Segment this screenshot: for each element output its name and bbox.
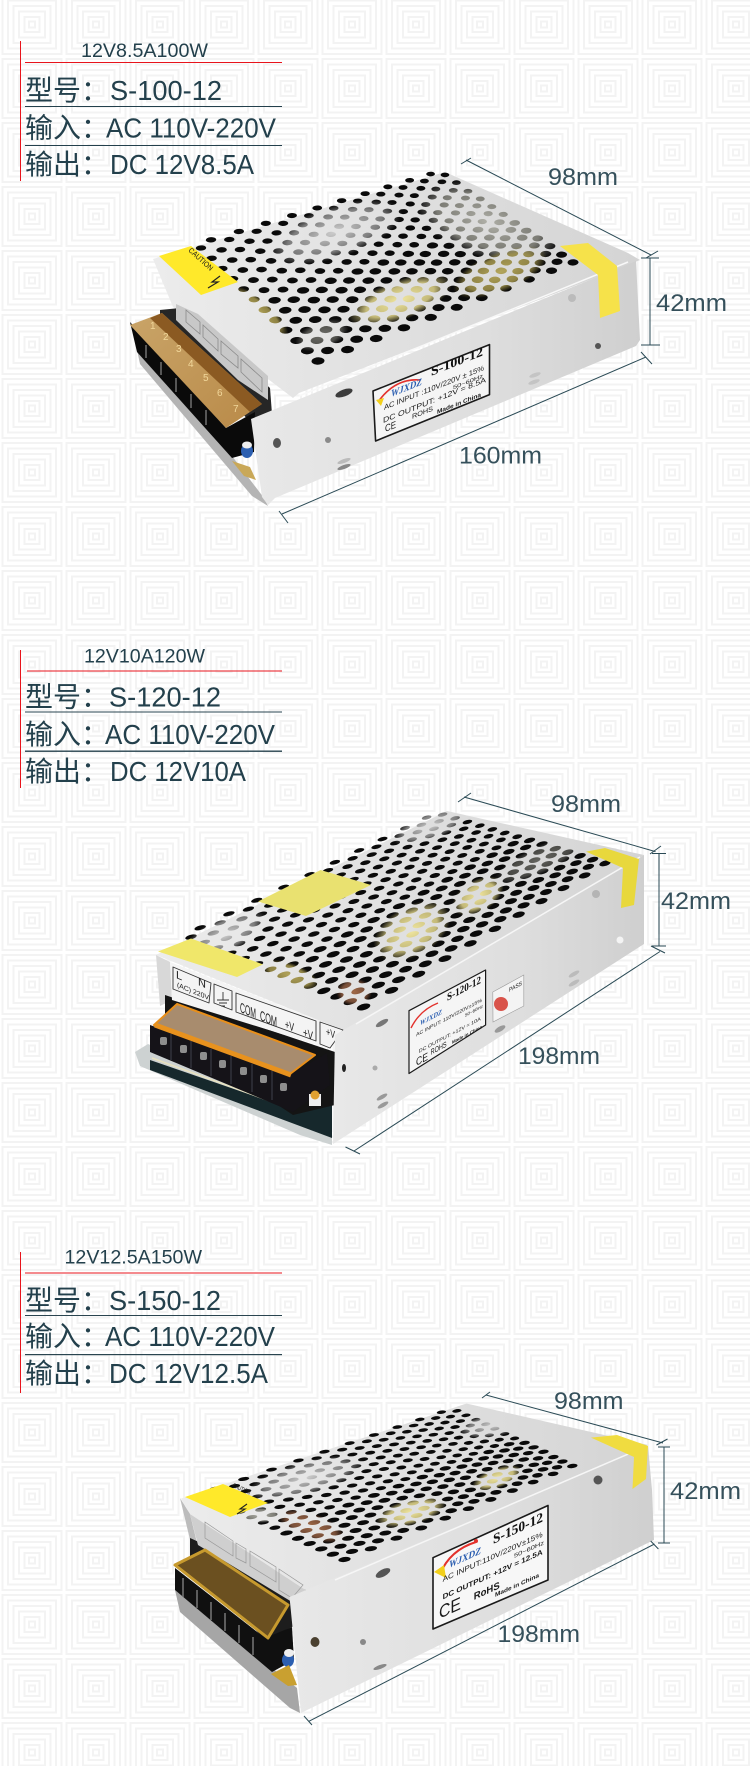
length value: 198mm bbox=[498, 1621, 580, 1648]
label frequency: 50~60Hz bbox=[514, 1540, 544, 1560]
clear base flange bbox=[135, 1044, 332, 1145]
PASS sticker bbox=[493, 975, 524, 1022]
output row: DC 12V10A bbox=[110, 756, 246, 787]
product photo: S-150-12 power supply bbox=[170, 1380, 654, 1713]
label output line: DC OUTPUT: +12V = 12.5A bbox=[443, 1547, 543, 1601]
input row bbox=[25, 1321, 275, 1352]
label logo: WJXDZ bbox=[449, 1546, 482, 1571]
length value: 160mm bbox=[459, 442, 542, 470]
terminal numbers bbox=[150, 321, 239, 415]
side panel highlight bbox=[299, 262, 628, 396]
output row: 输出： bbox=[25, 149, 109, 180]
model row: 型号： bbox=[25, 682, 109, 712]
terminal label strip bbox=[170, 962, 343, 1049]
terminal label strip bbox=[176, 304, 268, 400]
terminal label boxes bbox=[173, 967, 343, 1048]
label origin: Made in China bbox=[452, 1024, 482, 1046]
terminal markings: +V bbox=[285, 1017, 294, 1035]
terminal label boxes bbox=[186, 310, 262, 392]
dimensions: S-120-12 bbox=[346, 791, 731, 1154]
product label bbox=[433, 1506, 548, 1629]
yellow caution label bbox=[185, 1482, 268, 1517]
output row bbox=[25, 149, 254, 180]
label CE mark: CE bbox=[416, 1050, 428, 1069]
red heading rule bbox=[27, 670, 282, 672]
PASS sticker: PASS bbox=[509, 980, 522, 994]
length line bbox=[346, 946, 665, 1154]
length line bbox=[304, 1541, 658, 1725]
height line bbox=[658, 1447, 670, 1543]
model row: S-150-12 bbox=[109, 1285, 221, 1316]
model row: S-100-12 bbox=[110, 75, 222, 106]
red vertical rule bbox=[20, 1252, 21, 1393]
label input line: AC INPUT:110V/220V±15% bbox=[443, 1530, 543, 1584]
row rule bbox=[25, 145, 282, 146]
output row: DC 12V8.5A bbox=[110, 149, 254, 180]
yellow caution label: CAUTION bbox=[231, 1482, 252, 1497]
model row bbox=[25, 1285, 221, 1316]
side panel bbox=[290, 1446, 654, 1713]
terminal label strip bbox=[190, 1514, 310, 1602]
bottom flange bbox=[137, 350, 268, 506]
side panel holes bbox=[342, 890, 624, 1110]
yellow seal label bbox=[560, 243, 620, 318]
circuit board edge bbox=[232, 461, 256, 480]
label ROHS: ROHS bbox=[412, 404, 433, 421]
terminal numbers: 3 bbox=[176, 344, 182, 355]
product label bbox=[409, 970, 486, 1074]
panel: S-100-12 specification bbox=[20, 40, 282, 181]
circuit board edge bbox=[271, 1665, 297, 1686]
terminal screws bbox=[160, 1037, 287, 1091]
input row: 输入： bbox=[25, 1321, 109, 1352]
output row bbox=[25, 756, 246, 787]
label output line: DC OUTPUT: +12V = 8.5A bbox=[383, 375, 487, 425]
output row bbox=[25, 1358, 268, 1389]
potentiometer bbox=[309, 1090, 321, 1106]
output row: 输出： bbox=[25, 756, 109, 787]
label input line: AC INPUT: 110V/220V±15% bbox=[416, 998, 482, 1038]
terminal block notches bbox=[183, 1578, 253, 1655]
input row bbox=[25, 719, 275, 750]
cavity behind terminals bbox=[165, 995, 335, 1115]
earth symbol bbox=[217, 992, 229, 1006]
heading: 12V8.5A100W: 12V8.5A100W bbox=[81, 40, 209, 62]
label CE mark: CE bbox=[385, 420, 396, 435]
terminal numbers: 6 bbox=[217, 388, 223, 399]
faint terminal boxes bbox=[205, 1522, 303, 1598]
pale caution label bbox=[158, 938, 263, 977]
input row: AC 110V-220V bbox=[105, 1321, 275, 1352]
width line bbox=[458, 793, 661, 854]
label frequency: 50~60Hz bbox=[453, 374, 483, 391]
label logo: WJXDZ bbox=[420, 1007, 442, 1027]
model row: 型号： bbox=[25, 75, 109, 106]
label origin: Made in China bbox=[495, 1572, 540, 1599]
width line bbox=[482, 1392, 668, 1445]
terminal numbers: 1 bbox=[150, 321, 156, 332]
panel: S-150-12 specification bbox=[20, 1246, 282, 1393]
row rule bbox=[25, 1315, 282, 1316]
top cover bbox=[156, 811, 644, 1030]
label model: S-100-12 bbox=[431, 344, 483, 379]
label model: S-120-12 bbox=[447, 974, 481, 1004]
label frequency: 50~60Hz bbox=[465, 1003, 484, 1019]
width value: 98mm bbox=[554, 1388, 624, 1415]
side panel bbox=[251, 261, 640, 505]
yellow caution label bbox=[159, 246, 238, 295]
output row: DC 12V12.5A bbox=[109, 1358, 268, 1389]
vent holes bbox=[196, 172, 579, 365]
input row bbox=[25, 112, 276, 144]
yellow caution label: CAUTION bbox=[187, 246, 215, 273]
side panel bbox=[333, 855, 644, 1144]
yellow seal label bbox=[586, 848, 639, 908]
top cover bbox=[181, 1404, 648, 1593]
gap behind terminal labels bbox=[160, 308, 272, 422]
terminal numbers: 2 bbox=[163, 332, 169, 343]
terminal markings: L bbox=[176, 969, 182, 983]
red vertical rule bbox=[20, 650, 21, 788]
height value: 42mm bbox=[661, 888, 731, 915]
terminal block divisions bbox=[171, 1034, 272, 1100]
side panel highlight bbox=[356, 857, 640, 1024]
terminal numbers: 5 bbox=[203, 373, 209, 384]
red heading rule bbox=[25, 62, 282, 63]
top cover bbox=[153, 172, 640, 398]
length line bbox=[279, 352, 652, 523]
input row: 输入： bbox=[25, 112, 109, 144]
terminal markings: +V bbox=[303, 1025, 313, 1043]
label output line: DC OUTPUT: +12V = 10A bbox=[419, 1016, 481, 1055]
vent holes bbox=[185, 812, 611, 1010]
terminal block body bbox=[150, 1025, 330, 1112]
label CE mark: CE bbox=[439, 1594, 461, 1624]
potentiometer bbox=[241, 442, 253, 458]
height line bbox=[652, 854, 666, 946]
input row: 输入： bbox=[25, 719, 109, 750]
left flank bbox=[180, 1498, 198, 1548]
model row bbox=[25, 75, 222, 106]
model row: S-120-12 bbox=[109, 682, 221, 712]
bottom flange bbox=[175, 1590, 300, 1713]
terminal numbers: 7 bbox=[233, 404, 239, 415]
width value: 98mm bbox=[551, 791, 621, 818]
label input line: AC INPUT :110V/220V ± 15% bbox=[384, 363, 484, 412]
row rule bbox=[25, 1354, 282, 1355]
dimensions: S-150-12 bbox=[304, 1388, 741, 1725]
terminal markings: N bbox=[198, 976, 206, 991]
red vertical rule bbox=[20, 41, 21, 181]
heading: 12V12.5A150W: 12V12.5A150W bbox=[64, 1246, 203, 1268]
vent holes bbox=[210, 1409, 578, 1562]
terminal markings bbox=[176, 969, 335, 1043]
terminal numbers: 4 bbox=[188, 359, 194, 370]
pale yellow warning label on cover bbox=[258, 870, 371, 916]
label logo: WJXDZ bbox=[391, 377, 423, 400]
product label bbox=[373, 344, 490, 441]
height value: 42mm bbox=[670, 1478, 741, 1505]
product photo: S-100-12 power supply bbox=[130, 140, 640, 506]
gold terminal cover bbox=[175, 1550, 288, 1638]
terminal markings: COM bbox=[260, 1008, 277, 1031]
input row: AC 110V-220V bbox=[105, 719, 275, 750]
row rule bbox=[25, 750, 282, 752]
amber terminal cover bbox=[130, 313, 262, 428]
orange cover front bar bbox=[155, 1025, 291, 1075]
model row: 型号： bbox=[25, 1285, 109, 1316]
height line bbox=[641, 258, 660, 345]
width line bbox=[461, 158, 658, 258]
width value: 98mm bbox=[548, 164, 618, 191]
orange terminal cover bbox=[154, 1004, 315, 1074]
label RoHS: RoHS bbox=[474, 1580, 500, 1603]
length value: 198mm bbox=[518, 1043, 600, 1070]
terminal markings: +V bbox=[326, 1026, 335, 1042]
dimensions: S-100-12 bbox=[279, 158, 727, 523]
model row bbox=[25, 682, 221, 712]
panel: S-120-12 specification bbox=[20, 646, 282, 788]
row rule bbox=[25, 106, 282, 107]
red heading rule bbox=[25, 1272, 282, 1274]
amber cover dark band bbox=[150, 313, 262, 412]
terminal markings: COM bbox=[240, 1000, 256, 1022]
label origin: Made in China bbox=[437, 391, 482, 416]
side panel holes bbox=[273, 294, 601, 471]
circuit board underside bbox=[150, 1060, 332, 1138]
terminal block body bbox=[130, 322, 255, 458]
side panel highlight bbox=[335, 1449, 640, 1580]
cavity behind terminals bbox=[190, 1538, 310, 1640]
label ROHS: ROHS bbox=[431, 1039, 447, 1057]
left flank bbox=[156, 955, 172, 1006]
cream board line bbox=[152, 1058, 300, 1112]
row rule bbox=[25, 712, 282, 713]
output row: 输出： bbox=[25, 1358, 109, 1389]
terminal markings: (AC) 220V bbox=[177, 980, 209, 1002]
label model: S-150-12 bbox=[493, 1510, 543, 1548]
height value: 42mm bbox=[656, 290, 727, 317]
terminal block body bbox=[175, 1568, 294, 1672]
terminal block notches bbox=[146, 345, 206, 425]
input row: AC 110V-220V bbox=[106, 112, 276, 144]
yellow seal label bbox=[591, 1435, 648, 1489]
side panel holes bbox=[310, 1476, 602, 1671]
potentiometer bbox=[282, 1649, 294, 1667]
product photo: S-120-12 power supply bbox=[135, 780, 644, 1145]
heading: 12V10A120W: 12V10A120W bbox=[84, 646, 206, 668]
